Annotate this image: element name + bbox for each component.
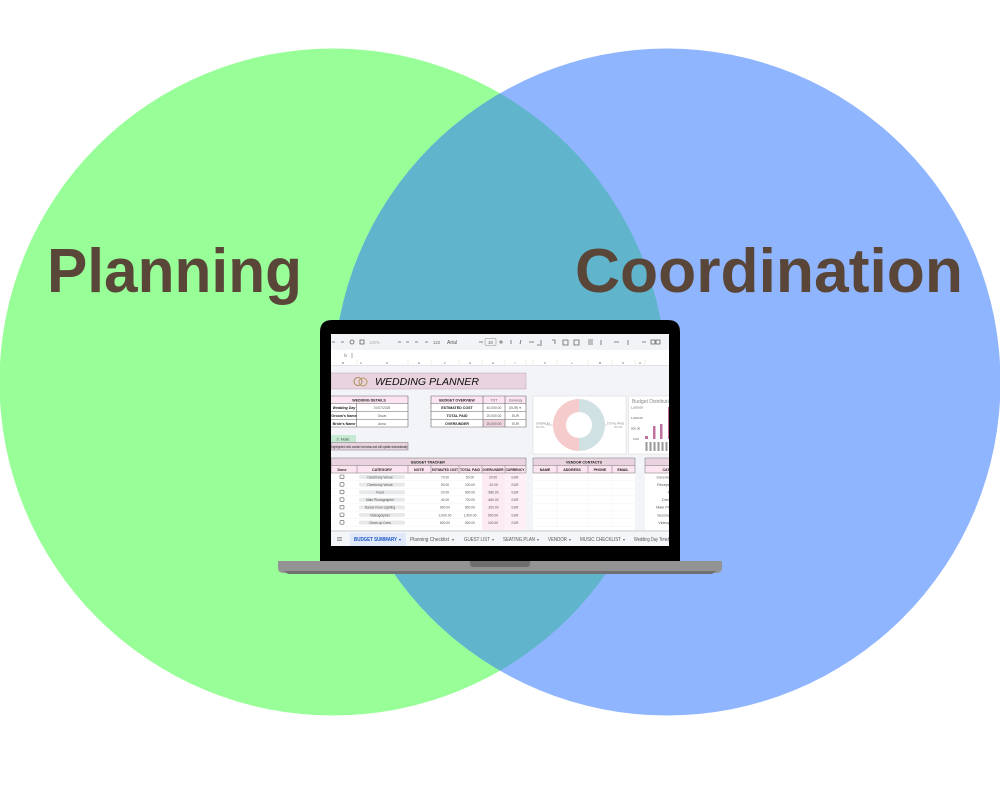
table: budget tracker: ESTIMATED COST — [432, 468, 459, 472]
column headers: C — [360, 361, 363, 365]
table: budget tracker: -580.00 — [487, 490, 499, 494]
table: budget tracker: OVER/UNDER — [482, 468, 504, 472]
table: budget overview — [431, 396, 526, 427]
label: Planning: Planning — [47, 237, 302, 306]
table: budget tracker: 500.00 — [488, 513, 498, 517]
sheet tabs: SEATING PLAN — [503, 537, 535, 543]
table: budget tracker: Ceremony Venue — [367, 475, 393, 479]
note — [331, 435, 408, 450]
table: budget tracker: 2,000.00 — [439, 513, 452, 517]
table: category list: Ceremo — [656, 475, 670, 479]
column headers: H — [492, 361, 494, 365]
laptop lid — [320, 320, 680, 562]
sheet tabs: GUEST LIST — [464, 537, 491, 543]
table: budget tracker: Food — [376, 490, 384, 494]
table: vendor contacts: PHONE — [594, 468, 607, 472]
table: vendor contacts: EMAIL — [617, 468, 629, 472]
table: budget overview: (EUR) ▾ — [509, 406, 521, 410]
table: wedding details: 07/07/2025 — [374, 406, 390, 410]
table: budget tracker: NOTE — [414, 468, 425, 472]
chart: donut: TOTAL PAID — [607, 422, 625, 426]
sheet tabs — [331, 530, 674, 546]
table: budget tracker: Done — [338, 468, 346, 472]
table: budget tracker: TOTAL PAID — [460, 468, 480, 472]
table: budget overview: ESTIMATED COST — [441, 406, 474, 410]
toolbar: Arial — [447, 340, 457, 346]
table: budget tracker: EUR — [512, 513, 519, 517]
column headers: I — [515, 361, 516, 365]
column headers: F — [444, 361, 446, 365]
laptop base — [278, 561, 722, 574]
table: budget overview: OVER/UNDER — [445, 422, 469, 426]
table: category list: Second — [657, 513, 670, 517]
sheet tabs: Planning Checklist — [410, 537, 449, 543]
circle overlap — [339, 94, 661, 670]
table: category list: CAT — [662, 468, 670, 472]
note: highlighted cells contain formulas and will update automatically — [332, 445, 408, 449]
table: budget tracker: CATEGORY — [372, 468, 393, 472]
toolbar: 123 — [433, 340, 441, 345]
laptop — [278, 320, 722, 574]
chart: budget distribution bars: Budget Distribution — [632, 399, 674, 405]
toolbar — [332, 338, 660, 346]
chart: donut: 50.0% — [536, 425, 545, 429]
sheet tabs: BUDGET SUMMARY — [354, 537, 397, 543]
sheet tabs: ▾ — [492, 537, 494, 542]
table: budget tracker: 50.00 — [466, 475, 474, 479]
toolbar: 10 — [488, 340, 493, 345]
table: vendor contacts: NAME — [540, 468, 551, 472]
sheet tabs: ▾ — [569, 537, 571, 542]
table: budget tracker: Clean up Crew — [369, 521, 392, 525]
table: vendor contacts: ADDRESS — [563, 468, 581, 472]
chart: donut — [533, 396, 626, 454]
column headers: M — [599, 361, 602, 365]
table: budget tracker: 500.00 — [465, 521, 475, 525]
table: budget tracker: 100.00 — [488, 521, 498, 525]
column headers: D — [386, 361, 389, 365]
table: budget tracker: EUR — [512, 483, 519, 487]
table: budget overview: 20,000.00 — [487, 414, 501, 418]
table: budget tracker: 20.00 — [441, 490, 449, 494]
chart: budget distribution bars — [628, 396, 674, 454]
table: budget tracker: 600.00 — [465, 490, 475, 494]
table: budget tracker: EUR — [512, 475, 519, 479]
table: budget tracker: 700.00 — [465, 498, 475, 502]
title: wedding planner — [331, 373, 526, 389]
table: budget tracker: 40.00 — [441, 498, 449, 502]
label: Coordination: Coordination — [575, 237, 963, 306]
table: budget tracker: BUDGET TRACKER — [411, 460, 445, 464]
sheet tabs: ▾ — [452, 537, 454, 542]
table: category list: F — [668, 490, 671, 494]
chart: budget distribution bars: 0.00 — [633, 437, 639, 441]
table: budget tracker: 800.00 — [465, 506, 475, 510]
table: budget overview: EUR — [512, 422, 520, 426]
table: category list: Recepti — [657, 483, 670, 487]
chart: budget distribution bars: 500.00 — [631, 426, 641, 430]
table: wedding details: Groom's Name — [331, 414, 357, 418]
table: budget tracker: Ceremony Venue — [367, 483, 393, 487]
table: budget overview: 40,000.00 — [487, 406, 501, 410]
table: budget tracker: 20.00 — [489, 475, 497, 479]
column headers: L — [571, 361, 573, 365]
table: budget tracker: EUR — [512, 506, 519, 510]
table: budget overview: BUDGET OVERVIEW — [439, 398, 475, 402]
table: category list — [645, 458, 671, 530]
spreadsheet screen — [331, 334, 674, 546]
table: budget tracker: -200.00 — [487, 506, 499, 510]
table: category list: Dres — [662, 498, 670, 502]
column headers — [331, 360, 669, 366]
table: budget tracker — [331, 458, 526, 530]
chart: donut: OVER/UN. — [536, 422, 551, 426]
table: wedding details: Bride's Name — [333, 422, 355, 426]
circle: planning — [0, 48, 666, 716]
chart: donut: 50.0% — [614, 425, 623, 429]
chart: budget distribution bars: 1,000.00 — [631, 416, 643, 420]
column headers: E — [418, 361, 420, 365]
table: budget overview: TOT — [491, 398, 497, 402]
table: budget tracker: EUR — [512, 498, 519, 502]
table: budget tracker: EUR — [512, 521, 519, 525]
table: budget tracker: -10.00 — [488, 483, 498, 487]
title: wedding planner: WEDDING PLANNER — [375, 376, 479, 388]
table: budget overview: EUR — [512, 414, 520, 418]
table: budget overview: TOTAL PAID — [447, 414, 468, 418]
toolbar: 100% — [369, 340, 380, 345]
formula bar: fx — [344, 353, 348, 358]
table: budget tracker: Dance Floor Lighting — [365, 506, 395, 510]
table: budget overview: Currency — [509, 398, 523, 402]
table: budget tracker: 600.00 — [440, 506, 450, 510]
table: budget tracker: EUR — [512, 490, 519, 494]
table: wedding details: WEDDING DETAILS — [352, 398, 386, 402]
sheet tabs: ▾ — [537, 537, 539, 542]
table: vendor contacts — [533, 458, 635, 530]
table: budget tracker: -660.00 — [487, 498, 499, 502]
sheet tabs: VENDOR — [548, 537, 567, 543]
column headers: O — [639, 361, 642, 365]
table: budget tracker: 90.00 — [441, 483, 449, 487]
column headers: B — [342, 361, 344, 365]
column headers: G — [469, 361, 472, 365]
table: budget tracker: 100.00 — [465, 483, 475, 487]
formula bar — [331, 350, 669, 360]
sheet tabs: ▾ — [623, 537, 625, 542]
table: wedding details — [331, 396, 408, 427]
table: budget tracker: 70.00 — [441, 475, 449, 479]
table: budget tracker: 1,500.00 — [464, 513, 477, 517]
sheet tabs: Wedding Day Timeline — [634, 537, 674, 543]
table: category list: Videog — [658, 521, 670, 525]
table: budget tracker: 600.00 — [440, 521, 450, 525]
table: vendor contacts: VENDOR CONTACTS — [566, 460, 603, 464]
table: category list: Main Ph — [656, 506, 670, 510]
table: budget tracker: Videographer — [370, 513, 391, 517]
sheet tabs: MUSIC CHECKLIST — [580, 537, 622, 543]
note: ⚠ Note: — [336, 436, 350, 442]
table: wedding details: Oscar — [378, 414, 387, 418]
chart: budget distribution bars: 1,500.00 — [631, 406, 643, 410]
table: wedding details: Anna — [378, 422, 386, 426]
table: budget overview: 20,000.00 — [487, 422, 501, 426]
column headers: N — [622, 361, 624, 365]
sheet tabs: ▾ — [399, 537, 401, 542]
table: budget tracker: CURRENCY — [506, 468, 525, 472]
table: wedding details: Wedding Day — [333, 406, 356, 410]
column headers: K — [544, 361, 546, 365]
table: budget tracker: Main Photographer — [366, 498, 395, 502]
circle: coordination — [334, 48, 1000, 716]
